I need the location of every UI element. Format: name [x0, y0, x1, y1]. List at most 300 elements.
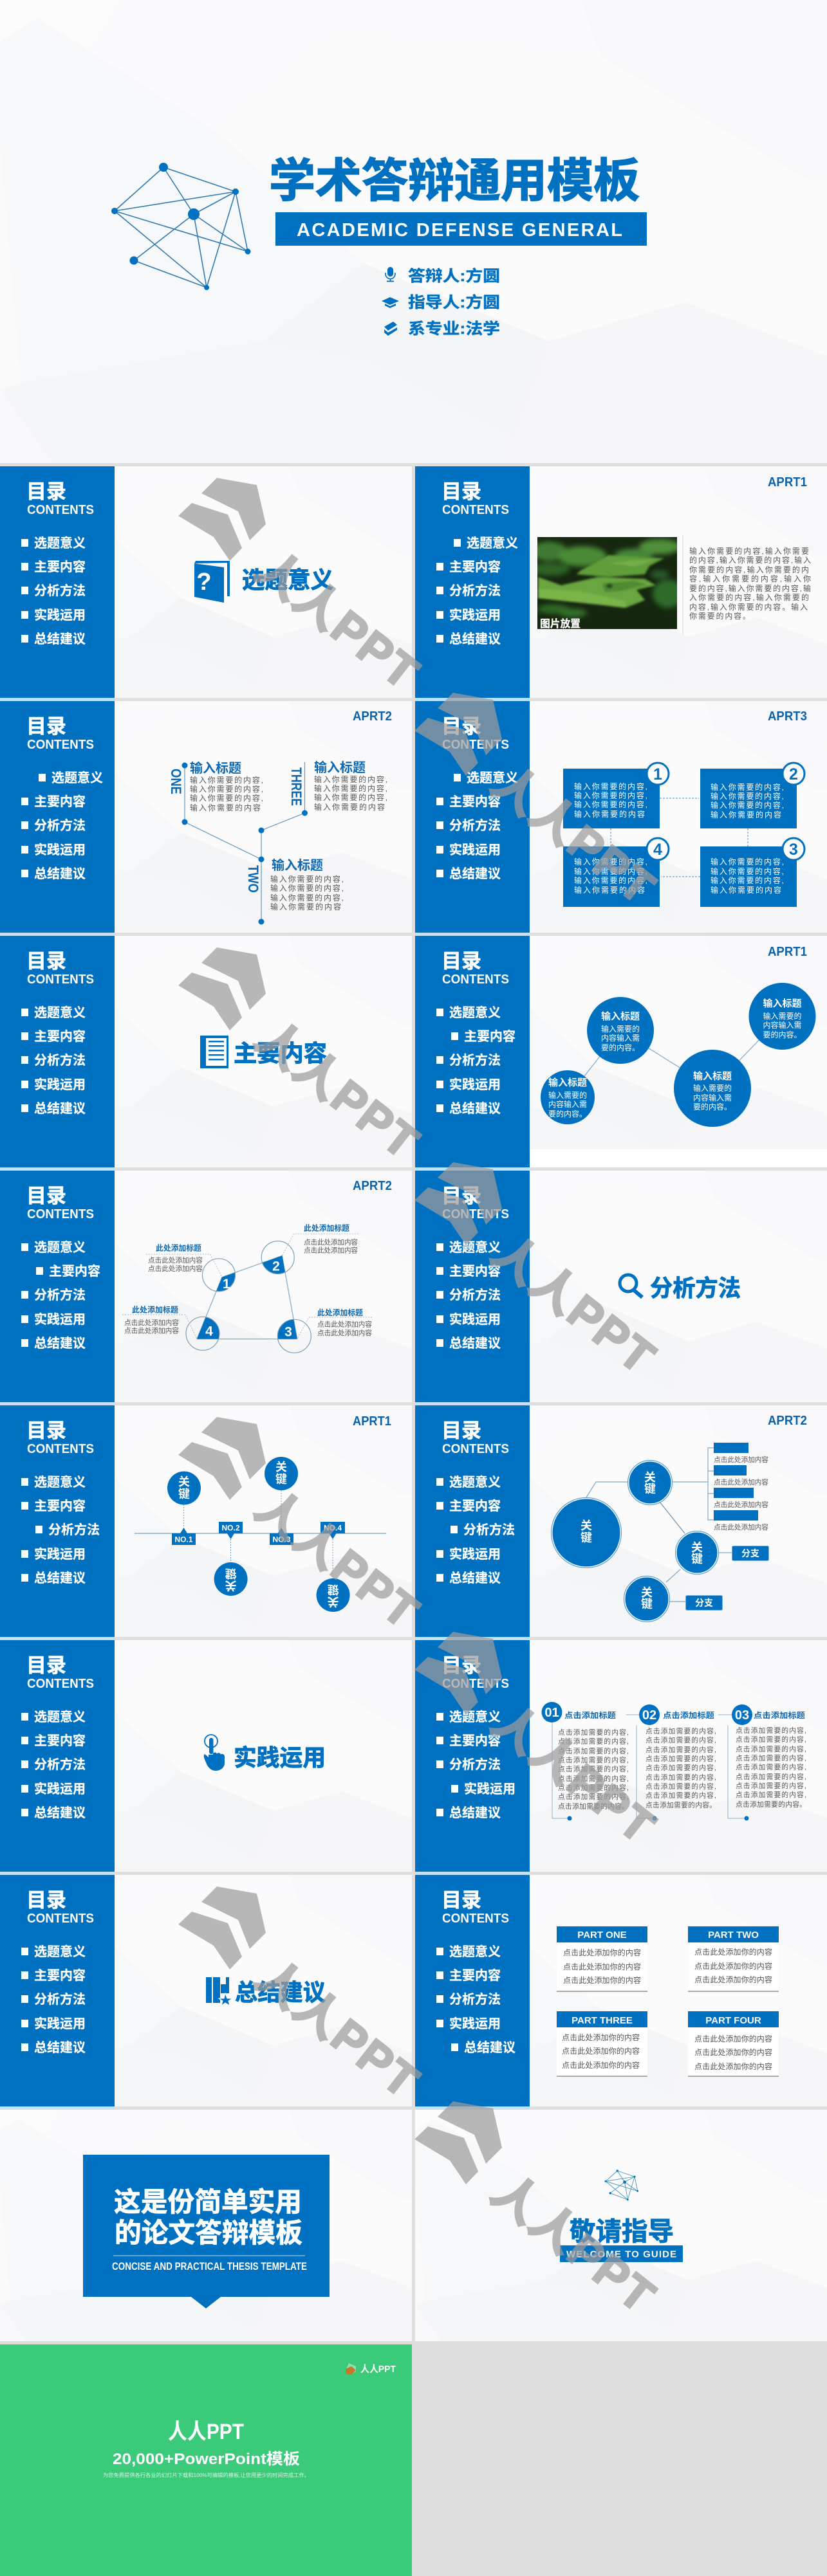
column 3: 点击添加需要的内容,: [736, 1782, 806, 1790]
branch two: 输入你需要的内容,: [270, 893, 344, 902]
sidebar contents: 实践运用: [449, 607, 501, 623]
sidebar contents: 总结建议: [34, 1336, 86, 1351]
sidebar contents: 分析方法: [34, 1287, 86, 1302]
part label: APRT3: [768, 709, 807, 724]
node NO.3: [265, 1457, 298, 1545]
icon: microphone: [386, 267, 395, 282]
sidebar contents: 总结建议: [34, 1101, 86, 1116]
icon: tapping hand: [204, 1735, 225, 1771]
sidebar contents: 目录: [26, 1420, 66, 1442]
branch tag lower: [686, 1595, 722, 1611]
branch three: 输入你需要的内容: [314, 802, 385, 812]
column 3: 点击添加需要的内容,: [736, 1754, 806, 1762]
empty grey area: [412, 2341, 827, 2576]
column 1: [542, 1702, 629, 1820]
sidebar contents: 实践运用: [34, 1311, 86, 1327]
sidebar contents: 目录: [26, 1889, 66, 1912]
circle right: 关: [691, 1541, 703, 1554]
sidebar contents: CONTENTS: [442, 503, 509, 517]
node NO.1: NO.1: [174, 1535, 193, 1544]
column 3: 点击添加需要的内容,: [736, 1735, 806, 1744]
column 3: 03: [735, 1708, 749, 1722]
box 3: [700, 838, 804, 907]
column 2: 点击添加需要的内容,: [646, 1746, 716, 1754]
column 2: [639, 1704, 716, 1820]
bubble: left: 输入标题: [548, 1077, 587, 1088]
sidebar contents: 选题意义: [34, 1239, 86, 1255]
node NO.3: 键: [275, 1473, 287, 1486]
sidebar contents: 目录: [26, 1654, 66, 1677]
sidebar contents: 总结建议: [34, 2040, 86, 2055]
section heading: 实践运用: [234, 1744, 326, 1771]
box 4: 4: [653, 841, 662, 859]
slide: APRT2 four circle quadrilateral: [0, 1171, 412, 1405]
closing bar: WELCOME TO GUIDE: [566, 2249, 676, 2260]
node NO.1: [167, 1472, 201, 1545]
sidebar contents: 目录: [441, 480, 481, 503]
node NO.4: 键: [328, 1583, 339, 1596]
watermark row 7 left: [178, 1886, 427, 2108]
sidebar contents: 实践运用: [34, 1077, 86, 1092]
branch one: 输入你需要的内容,: [190, 793, 263, 803]
brand logo: [346, 2363, 396, 2375]
sidebar contents: 分析方法: [34, 1757, 86, 1772]
sidebar contents: 分析方法: [449, 1991, 501, 2007]
sidebar contents: [0, 936, 115, 1171]
branch three: THREE: [288, 767, 304, 806]
bubble: top right: 输入需要的: [763, 1011, 802, 1021]
circle right: 键: [691, 1553, 703, 1566]
column 2: 点击添加标题: [663, 1710, 714, 1720]
sidebar contents: 总结建议: [34, 1571, 86, 1585]
section heading: 分析方法: [650, 1275, 741, 1301]
quadrilateral with filled circles: 1: [223, 1277, 230, 1292]
card: part two: 点击此处添加你的内容: [694, 1947, 772, 1957]
paragraph: 容,输入你需要的内容,输入你: [689, 574, 811, 583]
box 4: 输入你需要的内容: [574, 885, 645, 895]
sidebar contents: 主要内容: [449, 1498, 501, 1513]
column 1: 点击添加需要的内容,: [558, 1765, 629, 1773]
box 1: 输入你需要的内容,: [574, 781, 647, 791]
bubble: top right: 要的内容。: [763, 1030, 802, 1039]
section heading: 选题意义: [242, 567, 333, 593]
circle lower: 键: [641, 1598, 653, 1611]
connectors: [586, 1448, 732, 1602]
sidebar contents: 目录: [26, 480, 66, 503]
bubble: centre: 要的内容。: [693, 1102, 732, 1111]
branch two: 输入你需要的内容,: [270, 883, 344, 893]
branch two: 输入你需要的内容: [270, 902, 341, 911]
slide: analysis method divider: [415, 1171, 827, 1405]
sidebar contents: 分析方法: [449, 818, 501, 833]
box 1: 输入你需要的内容: [574, 809, 645, 819]
sidebar contents: 主要内容: [464, 1028, 516, 1044]
sidebar contents: 总结建议: [449, 632, 501, 646]
sidebar contents: 总结建议: [34, 632, 86, 646]
paragraph: 输入你需要的内容,输入你需要: [689, 546, 809, 556]
node NO.3: 关: [275, 1461, 287, 1474]
box 2: 输入你需要的内容,: [711, 800, 784, 810]
column 2: 点击添加需要的内容,: [646, 1736, 716, 1744]
sidebar contents: 实践运用: [449, 1546, 501, 1562]
quadrilateral with filled circles: 2: [272, 1259, 280, 1274]
watermark row 5 left: 人人PPT: [246, 1481, 427, 1638]
bars with captions: 点击此处添加内容: [714, 1501, 768, 1509]
sidebar contents: 目录: [26, 715, 66, 738]
card: part one: 点击此处添加你的内容: [563, 1962, 641, 1971]
brand logo: 人人PPT: [360, 2364, 396, 2375]
sidebar contents: 目录: [441, 715, 481, 738]
part label: APRT2: [353, 709, 392, 724]
sidebar contents: 目录: [26, 1185, 66, 1207]
sidebar contents: CONTENTS: [442, 1207, 509, 1221]
label 4: 此处添加标题: [132, 1304, 178, 1315]
slide: title cover: [0, 0, 827, 463]
label 1: 点击此处添加内容: [148, 1256, 203, 1265]
slide: APRT2 mind map: [415, 1405, 827, 1640]
sidebar contents: 实践运用: [34, 2016, 86, 2031]
watermark row 7 left: 人人PPT: [246, 1951, 427, 2108]
sidebar contents: 主要内容: [449, 1733, 501, 1748]
branch three: 输入你需要的内容,: [314, 774, 387, 784]
tree lines and nodes: [181, 762, 308, 925]
sidebar contents: CONTENTS: [442, 1442, 509, 1456]
label 3: [297, 1308, 372, 1339]
column 2: 点击添加需要的内容,: [646, 1727, 716, 1735]
icon: summary books and star: [206, 1977, 232, 2005]
main title: 学术答辩通用模板: [269, 156, 640, 207]
slide: thesis callout: [0, 2110, 412, 2341]
sidebar contents: 选题意义: [449, 1709, 501, 1724]
callout box: [83, 2155, 330, 2308]
sidebar contents: 总结建议: [449, 1805, 501, 1820]
circle upper: 键: [644, 1483, 656, 1495]
column 3: 点击添加需要的内容,: [736, 1745, 806, 1753]
part label: APRT2: [768, 1414, 807, 1428]
box 3: 输入你需要的内容,: [711, 866, 784, 876]
section heading: 主要内容: [234, 1040, 327, 1066]
presenter line: 答辩人:方圆: [408, 267, 500, 285]
photo: fern: [531, 537, 683, 630]
label 2: 点击此处添加内容: [304, 1247, 358, 1254]
bubble: left: 要的内容。: [548, 1109, 587, 1119]
sidebar contents: CONTENTS: [27, 1677, 94, 1691]
icon: books: [384, 322, 397, 336]
branch two: 输入标题: [272, 858, 323, 873]
sidebar contents: CONTENTS: [27, 1442, 94, 1456]
slide: APRT1 timeline: [0, 1405, 412, 1640]
promo title: 人人PPT: [168, 2420, 244, 2444]
card: part two: [688, 1926, 779, 1992]
sidebar contents: 目录: [441, 1889, 481, 1912]
small network logo: [605, 2170, 638, 2200]
column 3: 点击添加标题: [754, 1710, 805, 1720]
label 1: [146, 1243, 222, 1277]
branch one: ONE: [168, 769, 184, 794]
column 1: 01: [544, 1706, 559, 1720]
bubble: top left: 输入标题: [601, 1010, 640, 1022]
sidebar contents: 总结建议: [449, 866, 501, 881]
subtitle bar: [275, 212, 647, 246]
paragraph: 内容,输入你需要的内容。输入: [689, 602, 808, 612]
bubble: left: 内容输入需: [548, 1099, 587, 1109]
big circle: [551, 1497, 622, 1568]
sidebar contents: [0, 1640, 115, 1875]
slide: main content divider: [0, 936, 412, 1171]
paragraph: [689, 546, 811, 621]
sidebar contents: CONTENTS: [27, 503, 94, 517]
branch one: [168, 761, 263, 812]
sidebar contents: 主要内容: [34, 794, 86, 809]
sidebar contents: 总结建议: [449, 1336, 501, 1351]
slide: topic significance divider: [0, 466, 412, 701]
sidebar contents: CONTENTS: [442, 738, 509, 752]
sidebar contents: CONTENTS: [27, 1912, 94, 1926]
watermark row 1 left: 人人PPT: [246, 542, 427, 699]
branch one: 输入你需要的内容: [190, 803, 261, 812]
box 3: 3: [789, 841, 798, 859]
box 2: [700, 763, 804, 828]
part label: APRT1: [353, 1414, 391, 1429]
sidebar contents: 选题意义: [34, 535, 86, 551]
label 1: 此处添加标题: [156, 1243, 201, 1253]
sidebar contents: 主要内容: [34, 559, 86, 574]
subtitle bar: ACADEMIC DEFENSE GENERAL: [297, 220, 622, 241]
box 1: 1: [653, 765, 662, 783]
sidebar contents: 分析方法: [449, 583, 501, 598]
node NO.3: NO.3: [272, 1535, 291, 1544]
sidebar contents: 选题意义: [34, 1474, 86, 1490]
big circle: 关: [581, 1519, 592, 1532]
column 3: 点击添加需要的内容,: [736, 1726, 806, 1735]
label 4: 点击此处添加内容: [124, 1326, 179, 1335]
sidebar contents: [0, 1875, 115, 2110]
sidebar contents: 总结建议: [449, 1571, 501, 1585]
sidebar contents: 选题意义: [51, 770, 103, 785]
department line: 系专业:法学: [408, 320, 500, 338]
part label: APRT1: [768, 475, 807, 489]
quadrilateral with filled circles: 3: [284, 1325, 292, 1339]
sidebar contents: 总结建议: [34, 1805, 86, 1820]
promo subtitle: 20,000+PowerPoint模板: [113, 2451, 300, 2468]
column 2: 点击添加需要的内容。: [646, 1801, 716, 1809]
watermark row 1 left: [178, 478, 427, 699]
sidebar contents: CONTENTS: [27, 973, 94, 987]
sidebar contents: 分析方法: [449, 1757, 501, 1772]
circle lower: 关: [641, 1586, 653, 1599]
branch one: 输入标题: [190, 761, 241, 776]
node NO.2: NO.2: [221, 1523, 240, 1532]
card: part four: [688, 2011, 779, 2077]
paragraph: 你需要的内容,输入你需要的内: [689, 565, 809, 574]
sidebar contents: 主要内容: [449, 794, 501, 809]
label 1: 点击此处添加内容: [148, 1265, 203, 1273]
sidebar contents: [415, 701, 530, 936]
column 1: 点击添加需要的内容,: [558, 1747, 629, 1755]
column 2: 02: [642, 1708, 656, 1722]
column 1: 点击添加需要的内容,: [558, 1793, 629, 1801]
paragraph: 要的内容,输入你需要的内容,输: [689, 583, 811, 593]
card: part four: PART FOUR: [705, 2015, 761, 2026]
icon: document: [200, 1036, 228, 1068]
card: part four: 点击此处添加你的内容: [694, 2034, 772, 2043]
sidebar contents: 实践运用: [449, 1077, 501, 1092]
sidebar contents: 选题意义: [467, 770, 518, 785]
slide: APRT3 four box cycle: [415, 701, 827, 936]
branch three: 输入你需要的内容,: [314, 783, 387, 793]
connectors: [552, 1715, 747, 1818]
sidebar contents: 实践运用: [34, 1781, 86, 1796]
circle right: [676, 1531, 718, 1575]
watermark row 8 right: 人人PPT: [482, 2166, 664, 2323]
sidebar contents: 主要内容: [449, 1968, 501, 1983]
sidebar contents: 实践运用: [449, 2016, 501, 2031]
node NO.2: 关: [225, 1579, 237, 1592]
box 3: 输入你需要的内容: [711, 885, 781, 895]
callout box: CONCISE AND PRACTICAL THESIS TEMPLATE: [112, 2260, 307, 2272]
sidebar contents: [415, 1640, 530, 1875]
branch three: 输入你需要的内容,: [314, 792, 387, 802]
watermark row 6 right: [414, 1632, 664, 1853]
watermark row 6 right: 人人PPT: [482, 1696, 664, 1853]
sidebar contents: 主要内容: [34, 1028, 86, 1044]
column 1: 点击添加需要的内容。: [558, 1802, 629, 1811]
circle upper: 关: [644, 1471, 656, 1484]
quadrilateral with filled circles: 4: [205, 1324, 213, 1339]
divider line: [682, 535, 683, 635]
sidebar contents: CONTENTS: [442, 973, 509, 987]
card: part two: PART TWO: [708, 1930, 759, 1941]
sidebar contents: [415, 1875, 530, 2110]
watermark row 8 right: [414, 2101, 664, 2323]
card: part three: [557, 2011, 647, 2077]
sidebar contents: 实践运用: [34, 607, 86, 623]
watermark row 2 right: [414, 693, 664, 914]
network logo: [111, 163, 251, 290]
photo caption: 图片放置: [540, 618, 581, 630]
label 2: [282, 1223, 358, 1256]
bubble: top left: [587, 997, 654, 1064]
sidebar contents: 分析方法: [463, 1522, 515, 1537]
card: part four: 点击此处添加你的内容: [694, 2061, 772, 2071]
branch two: [245, 858, 344, 911]
sidebar contents: CONTENTS: [442, 1912, 509, 1926]
sidebar contents: 选题意义: [467, 535, 518, 551]
sidebar contents: 主要内容: [34, 1498, 86, 1513]
slide: summary divider: [0, 1875, 412, 2110]
column 2: 点击添加需要的内容,: [646, 1764, 716, 1772]
column 2: 点击添加需要的内容,: [646, 1791, 716, 1800]
card: part three: 点击此处添加你的内容: [562, 2060, 640, 2070]
icon: graduation cap: [382, 297, 399, 308]
node NO.1: 关: [178, 1475, 190, 1488]
column 2: 点击添加需要的内容,: [646, 1773, 716, 1782]
bars with captions: 点击此处添加内容: [714, 1478, 768, 1486]
paragraph: 入你需要的内容,输入你需要的: [689, 592, 809, 602]
slide: practice divider: [0, 1640, 412, 1875]
watermark row 4 right: 人人PPT: [482, 1227, 664, 1384]
sidebar contents: 主要内容: [49, 1263, 100, 1279]
card: part three: 点击此处添加你的内容: [562, 2032, 640, 2042]
slide: green promo: [0, 2344, 412, 2576]
label 3: 点击此处添加内容: [317, 1320, 372, 1329]
sidebar contents: 主要内容: [34, 1733, 86, 1748]
watermark row 2 right: 人人PPT: [482, 757, 664, 914]
sidebar contents: [0, 1171, 115, 1405]
branch tag right: [732, 1546, 768, 1560]
label 4: [122, 1304, 197, 1339]
branch three: 输入标题: [314, 760, 366, 775]
box 2: 2: [789, 765, 798, 783]
sidebar contents: [0, 1405, 115, 1640]
box 3: 输入你需要的内容,: [711, 875, 784, 885]
sidebar contents: 实践运用: [449, 842, 501, 857]
column 3: 点击添加需要的内容,: [736, 1763, 806, 1771]
card: part two: 点击此处添加你的内容: [694, 1975, 772, 1984]
sidebar contents: 实践运用: [34, 1546, 86, 1562]
sidebar contents: 选题意义: [34, 1709, 86, 1724]
column 1: 点击添加标题: [564, 1710, 616, 1720]
bubble: left: 输入需要的: [548, 1090, 587, 1100]
node NO.2: [214, 1522, 248, 1596]
slide: APRT1 photo and paragraph: [415, 466, 827, 701]
sidebar contents: CONTENTS: [27, 1207, 94, 1221]
box 4: 输入你需要的内容,: [574, 857, 647, 866]
bubble: top left: 输入需要的: [601, 1024, 640, 1034]
box 4: 输入你需要的内容,: [574, 875, 647, 885]
big circle: 键: [581, 1531, 592, 1544]
sidebar contents: [0, 466, 115, 701]
sidebar contents: 选题意义: [34, 1944, 86, 1959]
column 3: 点击添加需要的内容,: [736, 1791, 806, 1799]
sidebar contents: [0, 701, 115, 936]
bubble: centre: [674, 1050, 751, 1127]
sidebar contents: 选题意义: [449, 1474, 501, 1490]
sidebar contents: 选题意义: [449, 1239, 501, 1255]
sidebar contents: 选题意义: [449, 1005, 501, 1020]
sidebar contents: 主要内容: [449, 1263, 501, 1279]
card: part three: PART THREE: [571, 2015, 633, 2026]
advisor line: 指导人:方圆: [408, 293, 500, 311]
sidebar contents: 实践运用: [464, 1781, 516, 1796]
paragraph: 你需要的内容。: [689, 611, 750, 621]
sidebar contents: 目录: [441, 1185, 481, 1207]
connector lines: [568, 1016, 782, 1097]
bubble: top right: [749, 983, 816, 1050]
paragraph: 的内容,输入你需要的内容,输入: [689, 555, 811, 565]
sidebar contents: 实践运用: [34, 842, 86, 857]
column 3: 点击添加需要的内容。: [736, 1800, 806, 1809]
sidebar contents: 目录: [26, 950, 66, 973]
box 2: 输入你需要的内容: [711, 810, 781, 819]
sidebar contents: 主要内容: [34, 1968, 86, 1983]
slide: closing thanks: [415, 2110, 827, 2341]
card: part two: 点击此处添加你的内容: [694, 1961, 772, 1971]
label 3: 点击此处添加内容: [317, 1329, 372, 1337]
slide: APRT1 bubbles: [415, 936, 827, 1171]
slide: four part cards: [415, 1875, 827, 2110]
bubble: left: [541, 1070, 595, 1124]
section heading: 总结建议: [235, 1979, 326, 2005]
column 3: [732, 1704, 806, 1820]
quadrilateral with filled circles: [186, 1241, 311, 1353]
icon: question book: [194, 561, 230, 603]
part label: APRT2: [353, 1179, 392, 1193]
column 2: 点击添加需要的内容,: [646, 1755, 716, 1763]
box 4: [563, 838, 669, 907]
watermark row 5 left: [178, 1417, 427, 1638]
card: part one: 点击此处添加你的内容: [563, 1975, 641, 1985]
